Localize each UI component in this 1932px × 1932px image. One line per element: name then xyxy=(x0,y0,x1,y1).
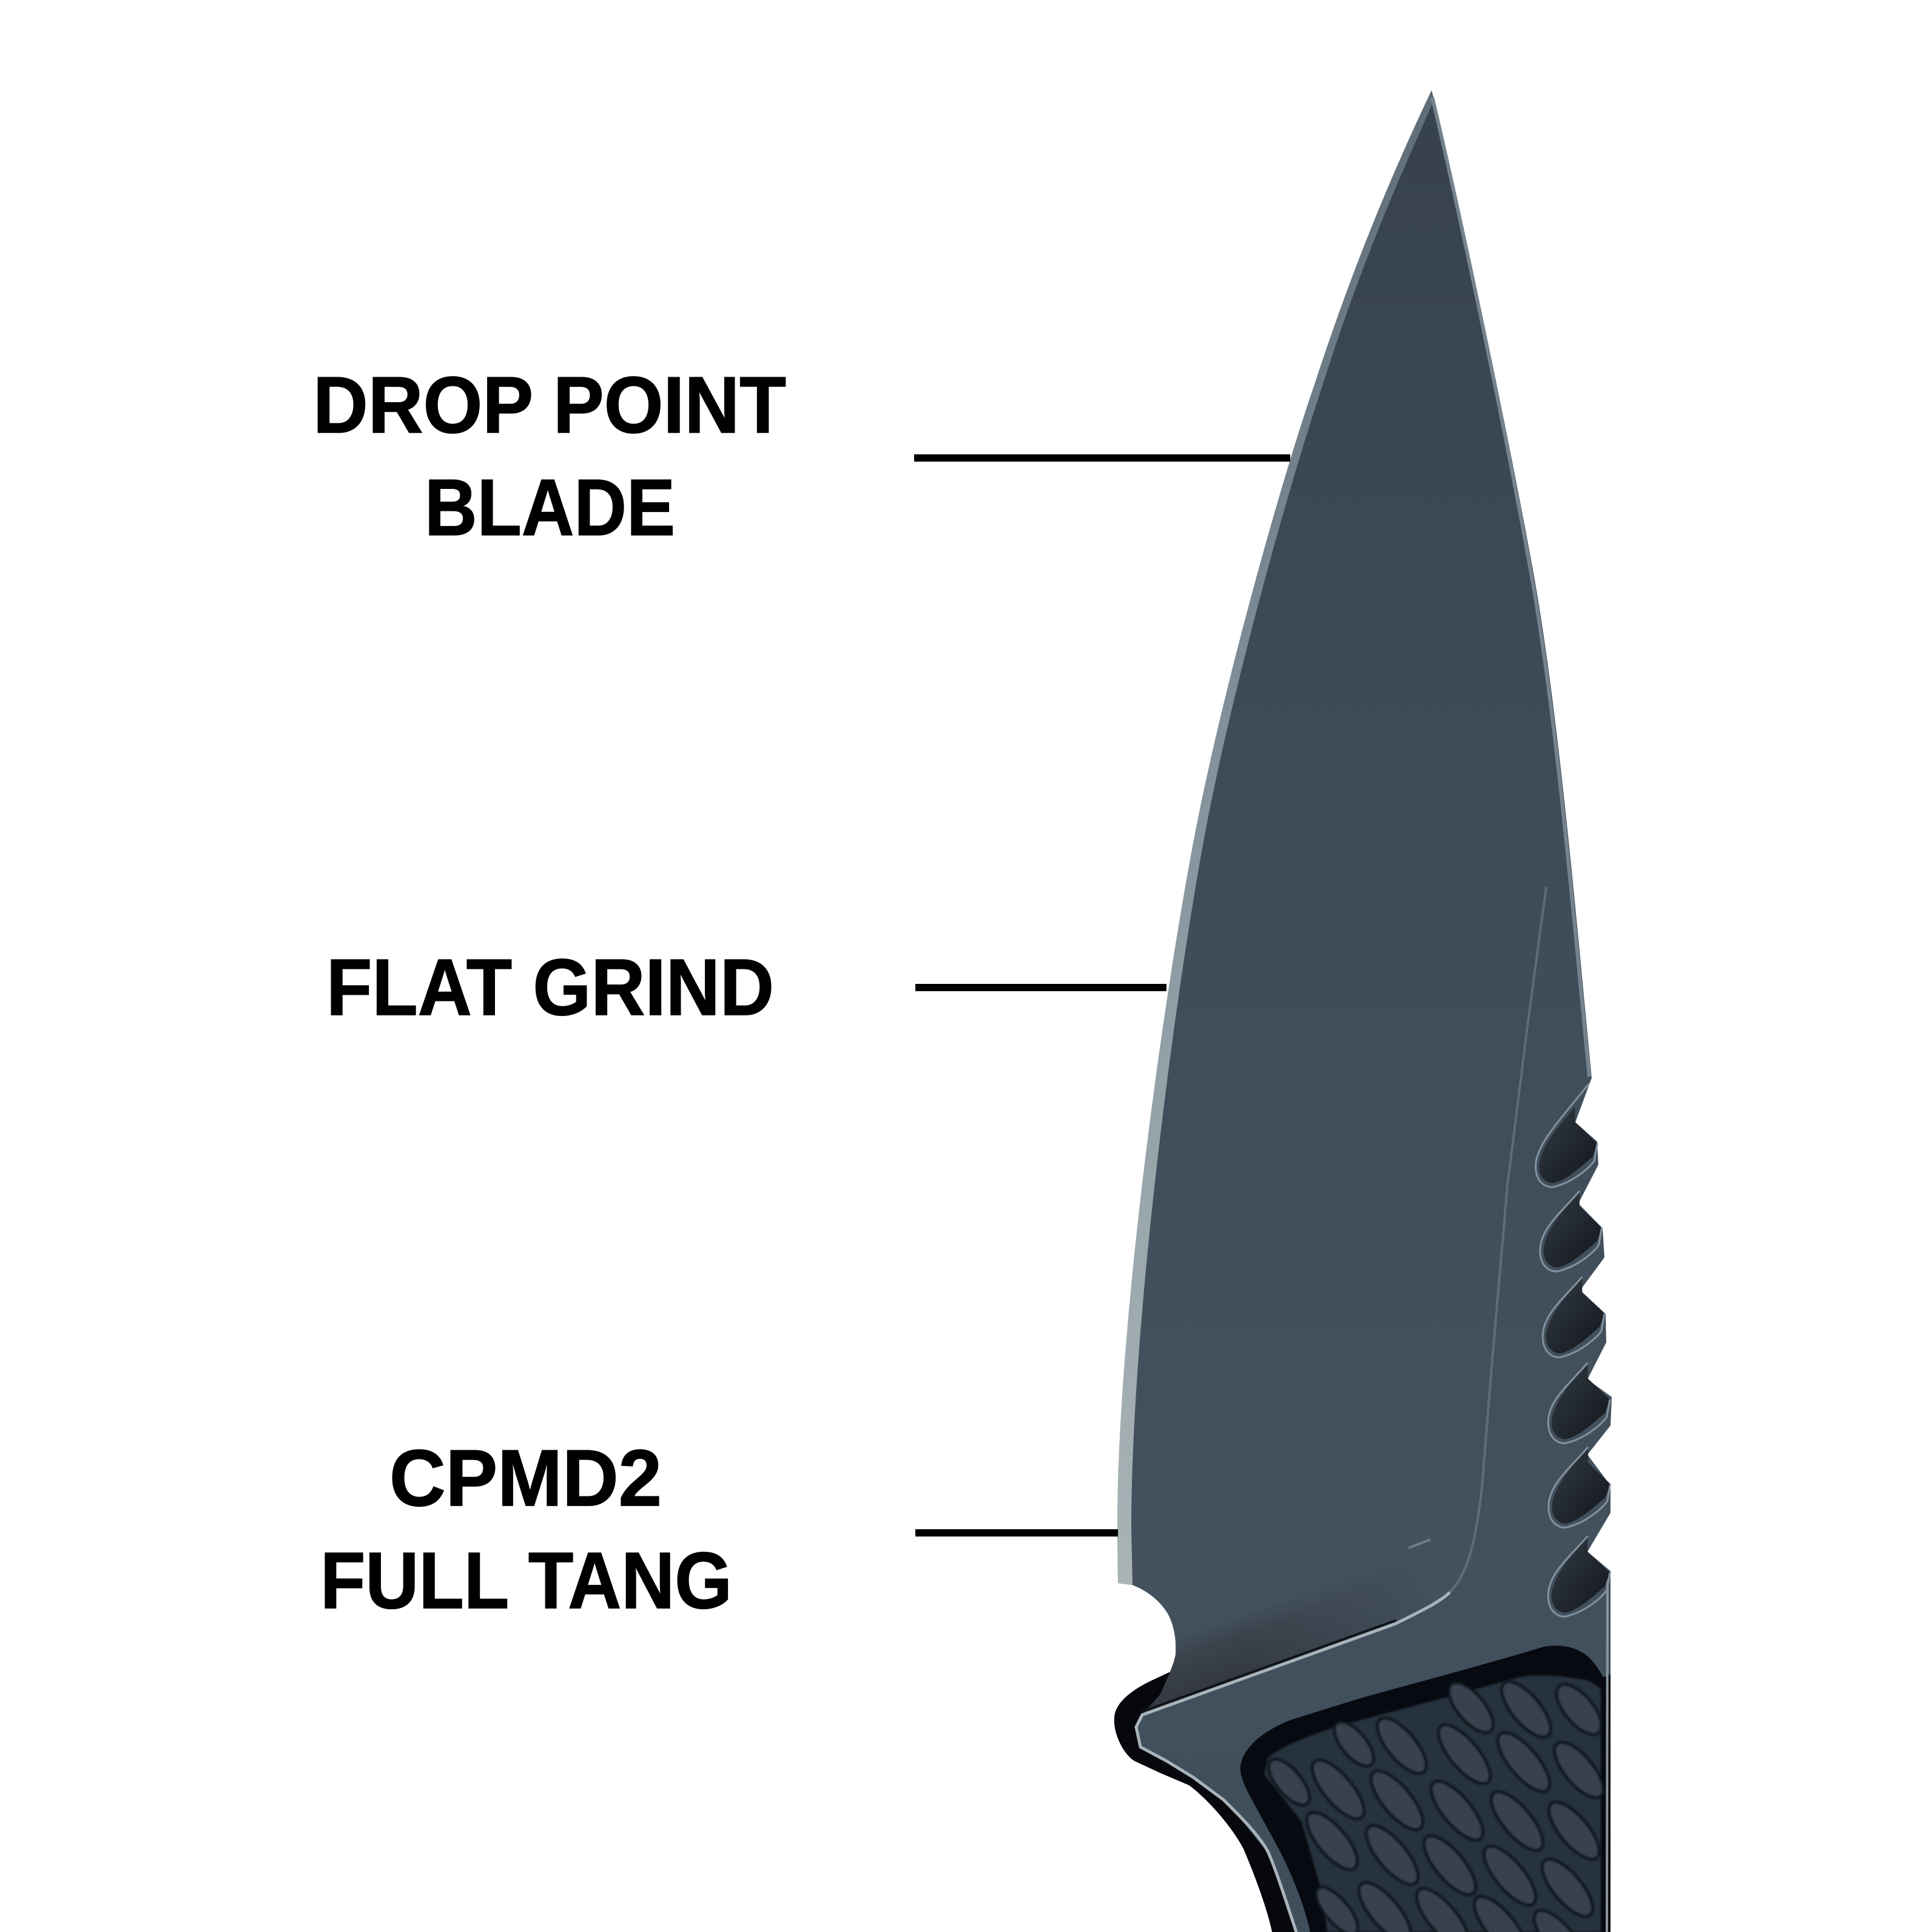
label: CPMD2 full tang xyxy=(320,1433,732,1625)
grip pocket xyxy=(1240,1646,1611,1932)
label: drop point blade: BLADE xyxy=(425,463,675,552)
label: CPMD2 full tang: CPMD2 xyxy=(389,1433,662,1523)
leader line: full tang xyxy=(915,1529,1118,1537)
leader line: flat grind xyxy=(915,984,1166,991)
scratch mark xyxy=(1409,1540,1430,1548)
bolster line xyxy=(1136,1592,1450,1932)
grip texture xyxy=(1264,1675,1601,1932)
label: flat grind: FLAT GRIND xyxy=(326,943,774,1032)
label: CPMD2 full tang: FULL TANG xyxy=(320,1536,732,1625)
leader line: drop point blade xyxy=(914,454,1290,462)
shaded band by the notch xyxy=(1145,1597,1381,1712)
blade xyxy=(1117,90,1612,1932)
handle silhouette xyxy=(1114,1571,1611,1932)
label: drop point blade: DROP POINT xyxy=(313,360,786,449)
blade serrations xyxy=(1536,1083,1611,1617)
grind line xyxy=(1450,887,1546,1592)
blade edge bevel xyxy=(1117,90,1432,1585)
knife illustration xyxy=(1114,90,1612,1932)
spine edge highlight xyxy=(1432,97,1589,1077)
grip ovals xyxy=(1262,1674,1612,1932)
label: drop point blade xyxy=(313,360,786,552)
